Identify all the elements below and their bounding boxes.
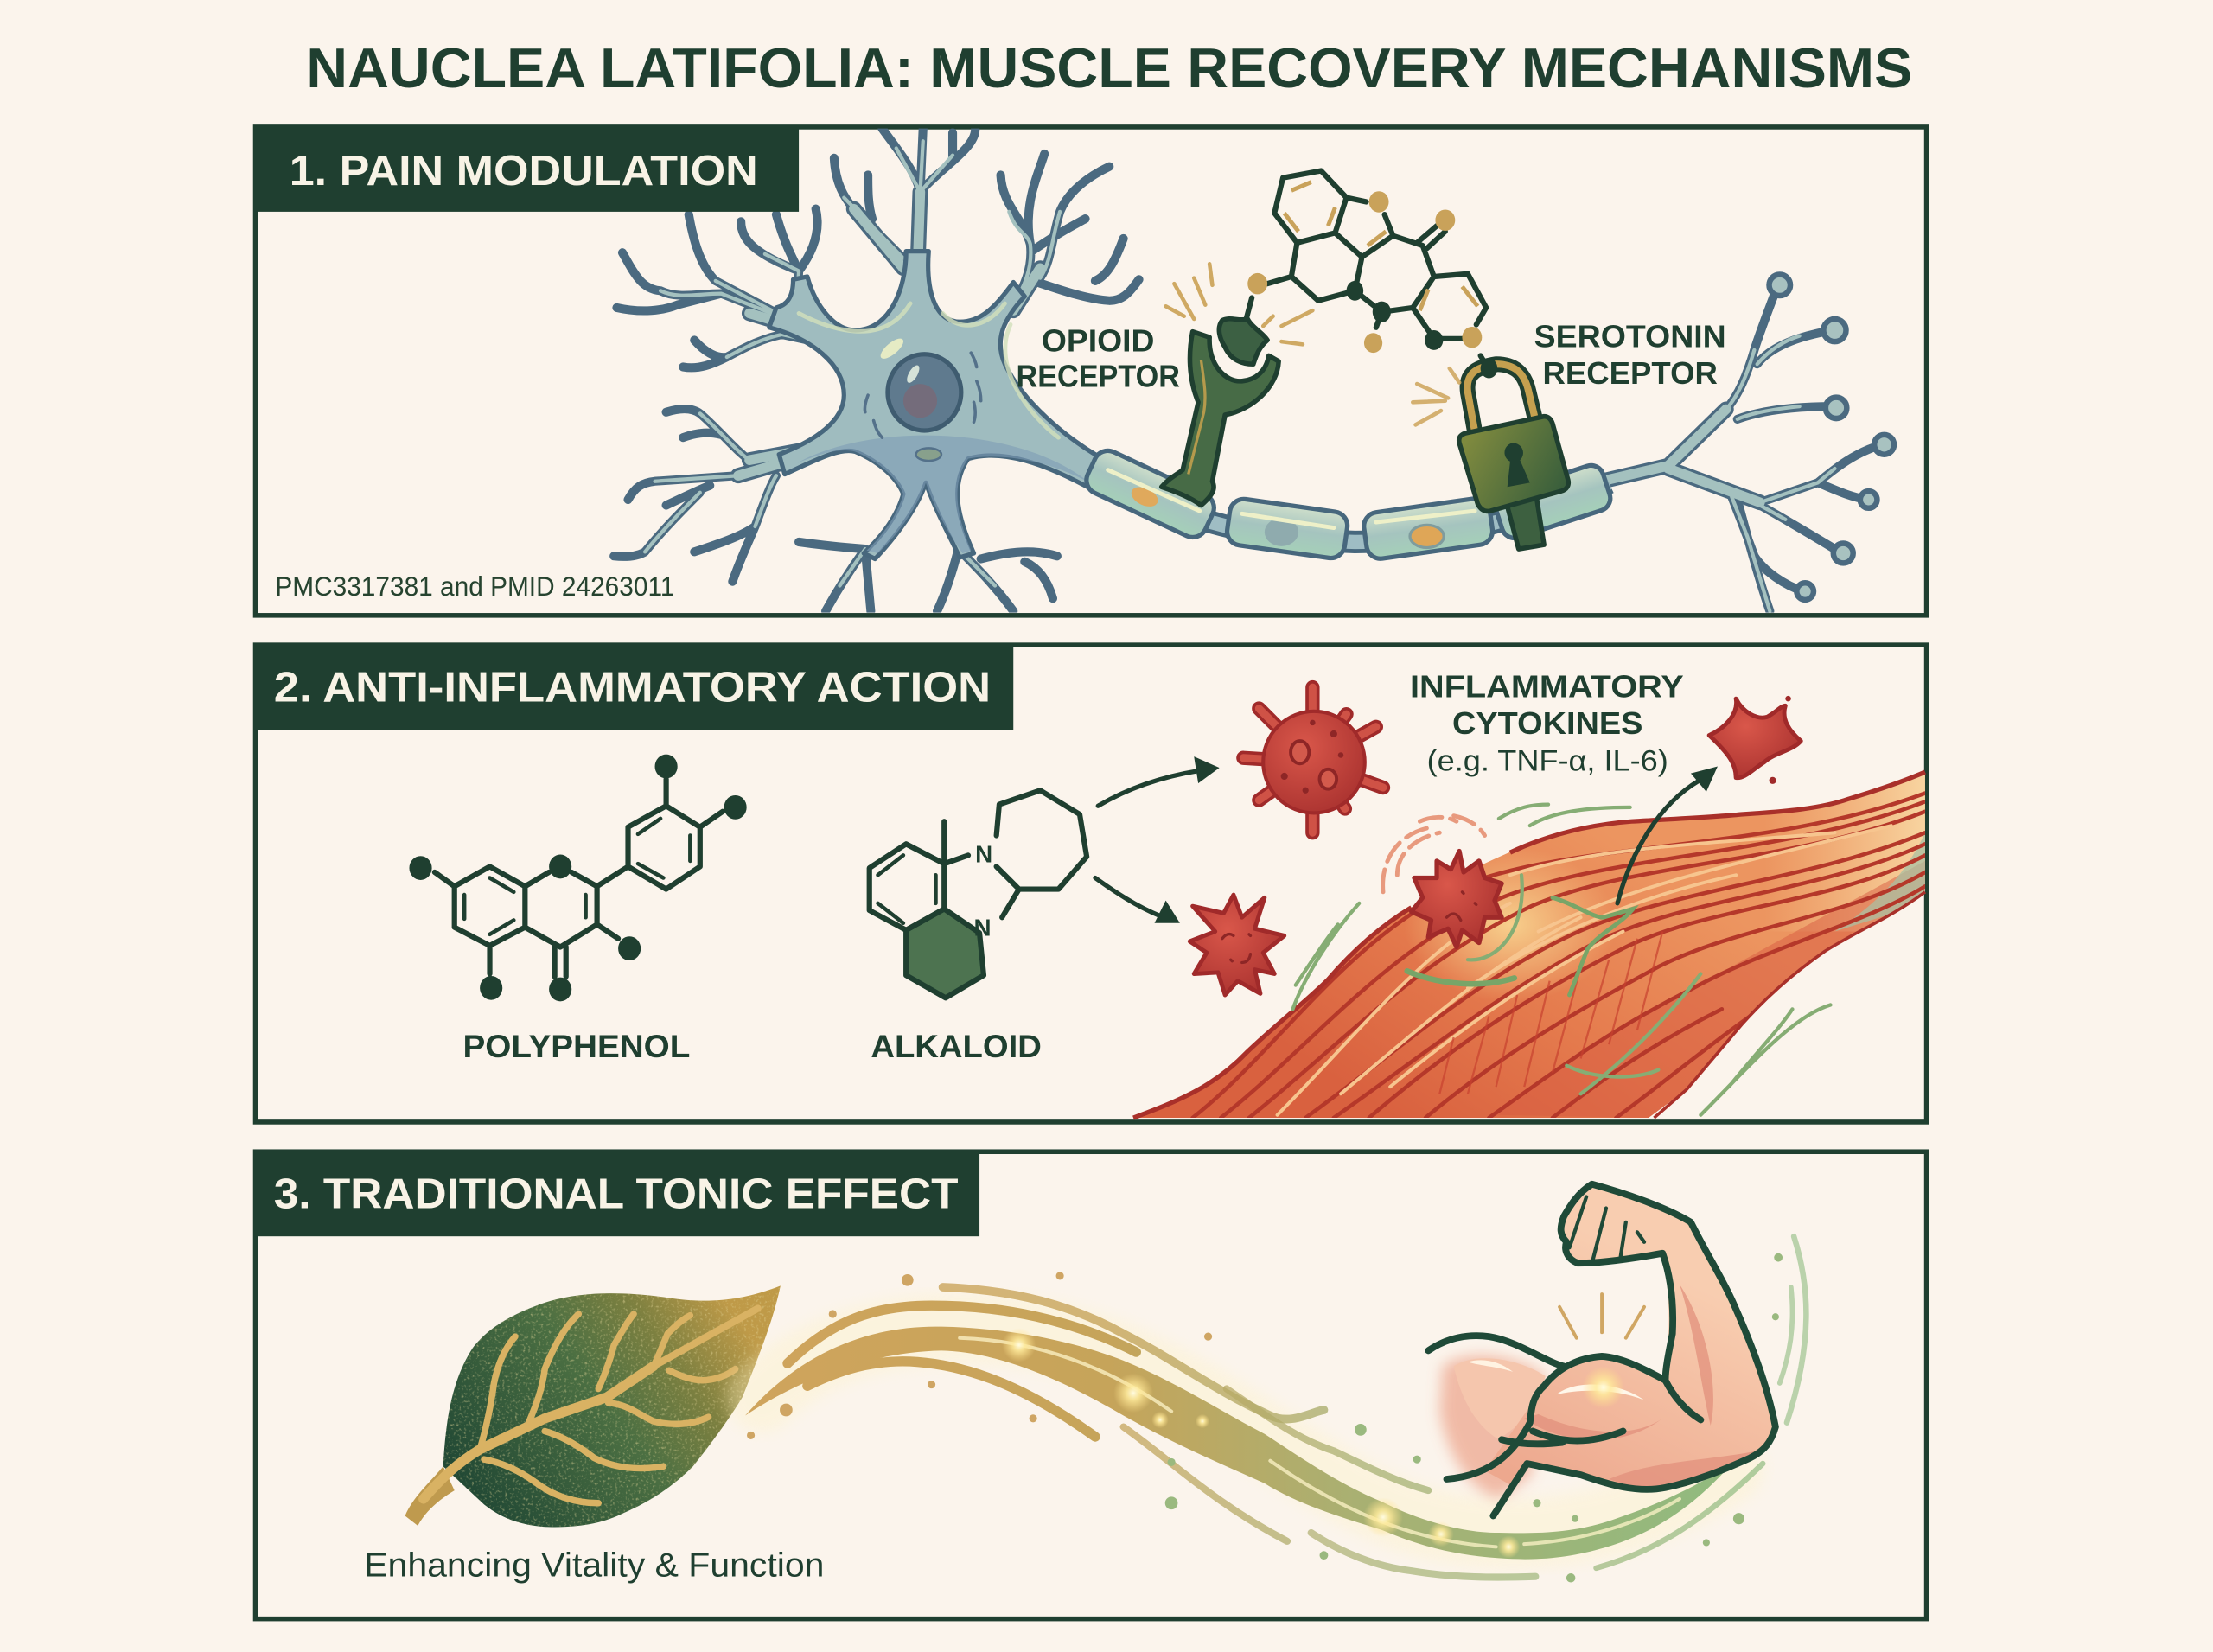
lock shackle: [1468, 364, 1535, 432]
icon: cytokine fragment: [1709, 696, 1801, 784]
chemical structure: polyphenol: [409, 755, 747, 1001]
arrow to large cytokine: [1098, 756, 1220, 806]
muscle fill: [1129, 762, 1934, 1129]
label: inflammatory cytokines: CYTOKINES: [1452, 705, 1642, 741]
fist finger lines: [1570, 1196, 1644, 1263]
icon: opioid burst marks: [1166, 264, 1312, 344]
chemical structure: ligand molecule: [1247, 171, 1497, 379]
heading tab: tonic effect: [254, 1151, 979, 1236]
citation: PMC3317381 and PMID 24263011: [275, 571, 674, 602]
shoulder shading: [1439, 1355, 1546, 1499]
muscle fibers: [1193, 794, 1925, 1118]
myelin segment 4: [1492, 462, 1614, 541]
axon with myelin segments: [1082, 446, 1614, 560]
icon: serotonin receptor lock: [1459, 364, 1568, 549]
label: opioid receptor: RECEPTOR: [1017, 358, 1180, 393]
myelin nodes: [1108, 470, 1475, 547]
icon: cytokine on muscle with pulse rings: [1383, 816, 1502, 947]
swoosh particles: [747, 1272, 1212, 1439]
myelin segment 1: [1082, 446, 1219, 542]
leaf stem: [405, 1466, 455, 1526]
dendrite outlines: [614, 129, 1883, 611]
title: NAUCLEA LATIFOLIA: MUSCLE RECOVERY MECHANISMS: [306, 36, 1912, 99]
label: serotonin receptor: RECEPTOR: [1542, 355, 1718, 391]
icon: large cytokine virus: [1243, 687, 1383, 832]
pulse rings: [1383, 816, 1485, 892]
leaf blade: [443, 1285, 781, 1528]
molecule bonds: [1247, 171, 1489, 370]
green anti-inflammatory strokes: [1293, 805, 1831, 1115]
illustration: leaf: [405, 1285, 781, 1528]
soft glow around swoosh: [762, 1329, 1729, 1534]
arm outline: [1428, 1184, 1776, 1515]
heading tab: pain modulation: [254, 125, 799, 212]
arrow to small cytokine: [1095, 877, 1180, 923]
icon: small cytokine spiky: [1189, 895, 1285, 995]
arrow from muscle to cytokine: [1617, 767, 1718, 903]
lock pin: [1506, 491, 1544, 549]
icon: opioid receptor cup: [1162, 319, 1279, 505]
leaf veins: [424, 1308, 758, 1503]
dendrite tip bulbs: [1770, 275, 1894, 600]
molecule inner gold bonds: [1285, 182, 1477, 310]
illustration: neuron: [614, 129, 1894, 611]
heading tab: anti-inflammatory: [254, 643, 1013, 730]
chemical structure: alkaloid: [870, 790, 1087, 998]
chemical structure: alkaloid: N: [974, 914, 992, 941]
heading tab: tonic effect: 3. TRADITIONAL TONIC EFFECT: [274, 1171, 959, 1218]
panel: anti-inflammatory action: [254, 643, 1934, 1129]
nucleus: [888, 354, 961, 431]
label: alkaloid: ALKALOID: [871, 1029, 1042, 1064]
swoosh main band: [745, 1327, 1733, 1560]
label: inflammatory cytokines: INFLAMMATORY: [1410, 669, 1684, 705]
dendrite inner fill: [645, 141, 1834, 611]
icon: serotonin burst marks: [1413, 368, 1459, 424]
label: opioid receptor: OPIOID: [1042, 323, 1155, 359]
molecule atoms: [1247, 191, 1482, 353]
arrows from alkaloid and muscle: [1095, 756, 1718, 923]
panel: traditional tonic effect: [254, 1151, 1927, 1619]
lock body: [1459, 417, 1568, 511]
lock keyhole: [1504, 443, 1530, 487]
heading tab: anti-inflammatory: 2. ANTI-INFLAMMATORY ACTION: [274, 664, 991, 711]
swoosh glow points: [1002, 1328, 1520, 1558]
label: inflammatory cytokines: (e.g. TNF-α, IL-6): [1427, 744, 1668, 777]
soma highlights and shading: [797, 436, 1089, 553]
heading tab: pain modulation: 1. PAIN MODULATION: [290, 148, 758, 195]
illustration: muscle: [1129, 762, 1934, 1129]
caption: Enhancing Vitality & Function: [364, 1547, 824, 1585]
label: serotonin receptor: SEROTONIN: [1534, 319, 1726, 354]
panel: pain modulation: [254, 125, 1927, 616]
illustration: flexed arm: [1428, 1184, 1776, 1515]
axon connector: [1095, 473, 1609, 542]
chemical structure: alkaloid: N: [975, 841, 992, 868]
arm muscle shading: [1524, 1285, 1757, 1489]
muscle cross-hatching: [1439, 932, 1662, 1094]
arm skin: [1485, 1184, 1776, 1489]
energy swoosh from leaf to arm: [745, 1236, 1806, 1583]
label: polyphenol: POLYPHENOL: [463, 1029, 690, 1064]
myelin segment 3: [1362, 497, 1495, 560]
leaf speckle: [443, 1285, 781, 1528]
icon: ligand fragment: [1219, 319, 1267, 364]
swoosh strands: [788, 1236, 1806, 1578]
flex marks: [1559, 1294, 1644, 1338]
swoosh highlights: [960, 1338, 1680, 1547]
myelin segment 2: [1225, 497, 1349, 560]
biceps highlight and glow: [1557, 1385, 1644, 1400]
muscle top outline: [1133, 772, 1925, 1118]
soma body: [769, 252, 1102, 559]
